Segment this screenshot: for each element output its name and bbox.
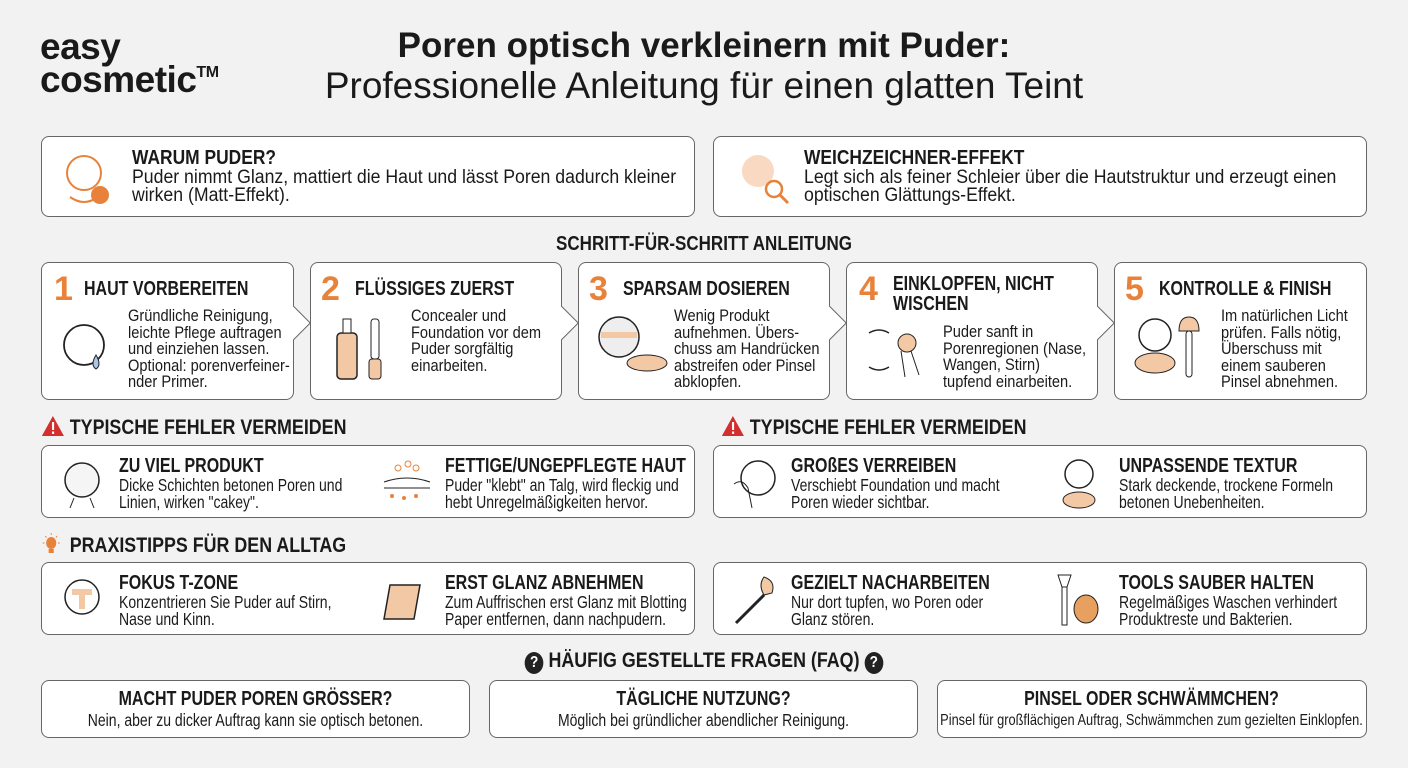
panel: weichzeichner: Legt sich als feiner Schleier über die Hautstruktur und erzeugt einen optischen Glättungs-Effekt.	[804, 167, 1336, 206]
heading: fehler right: TYPISCHE FEHLER VERMEIDEN	[750, 416, 1026, 439]
heading: fehler left: TYPISCHE FEHLER VERMEIDEN	[70, 416, 346, 439]
faq 2: TÄGLICHE NUTZUNG?	[616, 688, 791, 710]
heading: praxistipps: PRAXISTIPPS FÜR DEN ALLTAG	[70, 534, 346, 557]
step 2: Concealer und Foundation vor dem Puder sorgfältig einarbeiten.	[411, 306, 541, 374]
panel: fehler left: ZU VIEL PRODUKT	[119, 455, 264, 477]
icon: hand dabbing	[868, 329, 920, 378]
panel: tipps right: GEZIELT NACHARBEITEN	[791, 572, 990, 594]
step 3: 3	[589, 270, 608, 308]
step 4: WISCHEN	[893, 293, 969, 315]
title: Poren optisch verkleinern mit Puder:	[398, 26, 1010, 65]
panel: fehler left: FETTIGE/UNGEPFLEGTE HAUT	[445, 455, 686, 477]
step 1: Gründliche Reinigung, leichte Pflege auftragen und einziehen lassen. Optional: porenverfeiner-nder Primer.	[128, 306, 290, 391]
heading: faq: HÄUFIG GESTELLTE FRAGEN (FAQ)	[548, 649, 860, 672]
step 4: Puder sanft in Porenregionen (Nase, Wangen, Stirn) tupfend einarbeiten.	[943, 322, 1086, 390]
panel: fehler right	[713, 445, 1367, 518]
icon: face with drop	[63, 324, 105, 370]
panel: tipps left: Zum Auffrischen erst Glanz mit Blotting Paper entfernen, dann nachpudern.	[445, 592, 687, 629]
faq 3: PINSEL ODER SCHWÄMMCHEN?	[1024, 688, 1279, 710]
step 5	[1114, 262, 1367, 400]
panel: tipps right: Regelmäßiges Waschen verhindert Produktreste und Bakterien.	[1119, 592, 1337, 629]
step 5: KONTROLLE & FINISH	[1159, 278, 1331, 300]
step 3: Wenig Produkt aufnehmen. Übers-chuss am Handrücken abstreifen oder Pinsel abklopfen.	[674, 306, 819, 391]
step 1: HAUT VORBEREITEN	[84, 278, 248, 300]
step 4: 4	[859, 270, 878, 308]
icon: blurred face with magnifier	[742, 155, 789, 204]
title	[325, 26, 1083, 106]
panel: tipps right: TOOLS SAUBER HALTEN	[1119, 572, 1314, 594]
panel: fehler right: GROßES VERREIBEN	[791, 455, 956, 477]
heading: faq: ?	[870, 654, 878, 671]
step 4	[846, 262, 1098, 400]
panel: tipps left: FOKUS T-ZONE	[119, 572, 238, 594]
panel: weichzeichner: WEICHZEICHNER-EFFEKT	[804, 147, 1024, 169]
step 2: 2	[321, 270, 340, 308]
panel: fehler right: Verschiebt Foundation und macht Poren wieder sichtbar.	[791, 475, 1000, 512]
step 2	[310, 262, 562, 400]
step 3	[578, 262, 830, 400]
icon: t-zone face	[64, 579, 100, 615]
heading: schritt-für-schritt: SCHRITT-FÜR-SCHRITT ANLEITUNG	[556, 233, 852, 255]
icon: compact and brush	[1134, 316, 1200, 378]
icon: face with powder	[66, 155, 109, 204]
panel: weichzeichner	[713, 136, 1367, 217]
icon: brush	[735, 576, 774, 624]
panel: fehler right: Stark deckende, trockene Formeln betonen Unebenheiten.	[1119, 475, 1333, 512]
step 5: Im natürlichen Licht prüfen. Falls nötig, Überschuss mit einem sauberen Pinsel abnehmen.	[1221, 306, 1348, 391]
icon: cracked compact	[1062, 459, 1096, 508]
icon: puff and powder	[598, 316, 668, 372]
logo: cosmeticTM	[40, 59, 219, 100]
faq 1: Nein, aber zu dicker Auftrag kann sie optisch betonen.	[88, 710, 423, 730]
step 4: EINKLOPFEN, NICHT	[893, 273, 1054, 295]
icon: blotting paper	[383, 584, 421, 620]
panel: fehler left	[41, 445, 695, 518]
panel: fehler right: UNPASSENDE TEXTUR	[1119, 455, 1297, 477]
logo	[40, 26, 219, 100]
panel: tipps right	[713, 562, 1367, 635]
panel: warum puder: WARUM PUDER?	[132, 147, 276, 169]
panel: fehler left: Puder "klebt" an Talg, wird fleckig und hebt Unregelmäßigkeiten hervor.	[445, 475, 679, 512]
panel: fehler left: Dicke Schichten betonen Poren und Linien, wirken "cakey".	[119, 475, 342, 512]
icon: cakey face	[64, 462, 100, 508]
heading: faq: ?	[530, 654, 538, 671]
faq 3	[937, 680, 1367, 738]
panel: tipps left	[41, 562, 695, 635]
faq 1: MACHT PUDER POREN GRÖSSER?	[119, 688, 392, 710]
panel: warum puder: Puder nimmt Glanz, mattiert die Haut und lässt Poren dadurch kleiner wirken (Matt-Effekt).	[132, 167, 676, 206]
step 3: SPARSAM DOSIEREN	[623, 278, 790, 300]
step 1: 1	[54, 270, 73, 308]
logo: easy	[40, 26, 120, 67]
faq 1	[41, 680, 470, 738]
faq 2	[489, 680, 918, 738]
faq 2: Möglich bei gründlicher abendlicher Reinigung.	[558, 710, 849, 730]
panel: tipps left: Konzentrieren Sie Puder auf Stirn, Nase und Kinn.	[119, 592, 331, 629]
title: Professionelle Anleitung für einen glatten Teint	[325, 65, 1083, 106]
panel: tipps right: Nur dort tupfen, wo Poren oder Glanz stören.	[791, 592, 983, 629]
panel: tipps left: ERST GLANZ ABNEHMEN	[445, 572, 644, 594]
icon: foundation bottle	[336, 318, 382, 380]
panel: warum puder	[41, 136, 695, 217]
icon: brush and sponge	[1057, 574, 1098, 626]
faq 3: Pinsel für großflächigen Auftrag, Schwämmchen zum gezielten Einklopfen.	[940, 712, 1363, 729]
icon: oily skin	[384, 460, 430, 500]
step 5: 5	[1125, 270, 1144, 308]
step 2: FLÜSSIGES ZUERST	[355, 278, 514, 300]
step 1	[41, 262, 294, 400]
icon: rubbing face	[734, 460, 776, 508]
